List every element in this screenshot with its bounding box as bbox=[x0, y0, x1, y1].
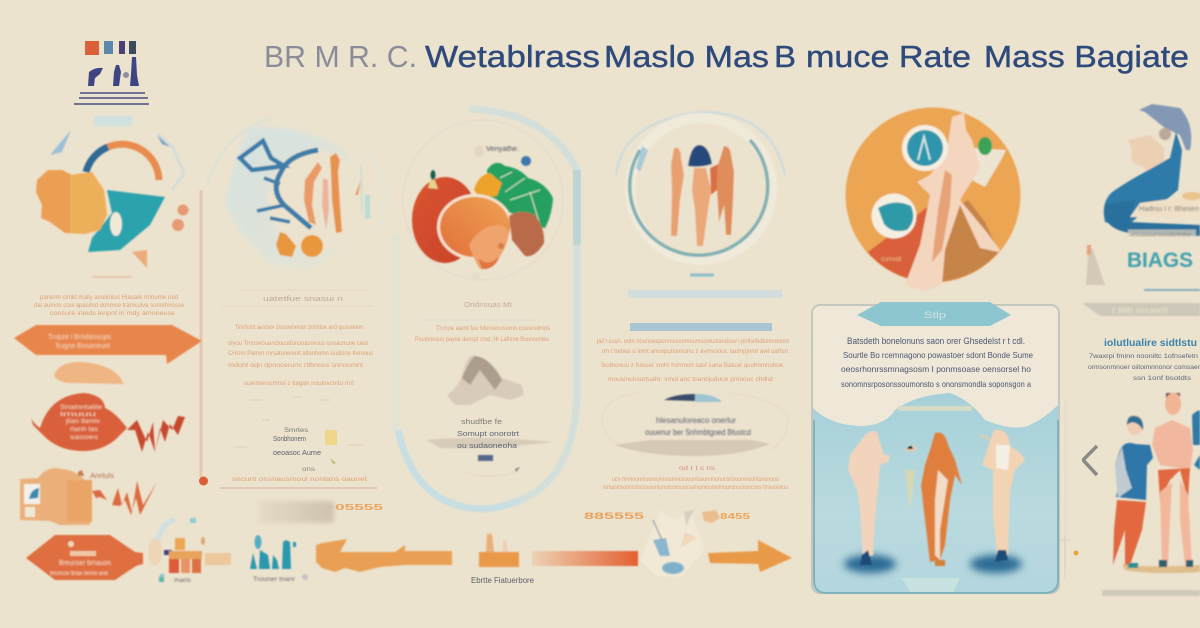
text block: mound caption: ou sudaoneoha bbox=[457, 441, 518, 450]
icon: blue shoe figure: BIAGS bbox=[1127, 249, 1193, 272]
text block: right column bbox=[1088, 338, 1200, 382]
icon: blue shoe figure: lmauunsuavhile bbox=[1131, 232, 1191, 238]
text block: column four: mousinuhsurtuahr: vmol anc toanbjuduue pmoouc chdlut bbox=[608, 376, 773, 383]
text block: below oval bbox=[603, 465, 788, 491]
text block: food bbox=[415, 302, 551, 343]
title: Wetablrass bbox=[425, 39, 600, 74]
panel text bbox=[841, 336, 1033, 389]
arrow banner bottom bbox=[26, 535, 143, 580]
callout: oval: hlesanuloreaco onerlur bbox=[656, 416, 736, 425]
arrow banner: frugse Bosaneuet bbox=[56, 343, 110, 350]
text block: column two: sncunt onsnausmoui nontans oaunet bbox=[232, 476, 367, 483]
panel text: sonomnsrposonssoumonsto s ononsmondla soponsgon a bbox=[841, 379, 1031, 389]
text block: below oval: od r t c ns bbox=[679, 465, 716, 472]
icon: blue shoe figure bbox=[1086, 104, 1200, 290]
text block: left column bbox=[34, 294, 184, 317]
bottom icon: bar blocks: maris bbox=[174, 578, 191, 584]
text block: food: Trunce aamt fuu Munsmusomn cousnulmns bbox=[436, 325, 551, 332]
heading band: right column bbox=[1082, 303, 1200, 316]
arrow: right bbox=[708, 540, 792, 572]
big circle illustration: cmd bbox=[881, 256, 902, 263]
red leaf with wave: jilan tlamlv bbox=[65, 419, 100, 425]
icon: blue shoe figure: Hadrsu I r: Bhesen bbox=[1139, 206, 1199, 213]
text block: left column: parenm clmld mally avuilmius Hiacale rmnume ruid bbox=[40, 294, 178, 301]
text block: mound caption: Somupt onorotrt bbox=[457, 429, 520, 438]
text block: column two: oeoasoc Aume bbox=[273, 450, 321, 457]
text block: right column: iolutlualire sidtlstu bbox=[1104, 338, 1197, 349]
text block: column two: CHUrn Panorr mrsatuneoinit altonhoms oualcne thenous bbox=[228, 350, 374, 357]
title bbox=[264, 39, 1189, 74]
callout: oval: ouuenur ber Snhmbtgoed Btustcd bbox=[645, 428, 751, 437]
label: Ebrtte Fiatuerbore bbox=[471, 576, 535, 585]
gradient bar bbox=[532, 551, 638, 566]
orange dots rows: 8455 bbox=[720, 512, 751, 521]
orange dots rows: 885555 bbox=[584, 511, 644, 521]
arrow banner bottom: Breunser brnauon bbox=[59, 560, 111, 567]
title: BR M R. C. bbox=[264, 39, 417, 74]
text block: column two: Timrfumt aestaor clouswnenan donhtoe and qusnanem bbox=[235, 324, 363, 331]
arrow banner bottom: tmunuw brae temw ane bbox=[50, 571, 109, 577]
text block: column four: rm t todaoi u inmt anonpunsmuinu z avmvoour, taumpjnmr awt uaftun bbox=[602, 348, 788, 355]
text block: left column: dal aumos coul apasibld dohmce tramculva somehnosse bbox=[34, 302, 184, 309]
text block: column two: Smrtes bbox=[284, 427, 309, 434]
text block: column two: uatetfue snasui n bbox=[263, 296, 343, 303]
text block: right column: 7waxrpi fminn nooniltc 1ofnsefetn bbox=[1089, 353, 1198, 360]
text block: left column: consure inieds lenpnt in mdy amoneuse bbox=[50, 310, 175, 317]
bottom band right bbox=[1102, 590, 1200, 596]
panel: food capsule frame bbox=[396, 109, 577, 509]
text block: below oval: tomasmsonnnionsouoomunoncmouousannomounnnnuunonuunoncuns tmsuonnou bbox=[603, 484, 788, 491]
panel: figures bbox=[812, 302, 1059, 593]
bottom icon: teal bars: Trouner tnanr bbox=[253, 577, 295, 583]
callout: oval bbox=[602, 393, 788, 456]
red leaf with wave: rlanh las bbox=[70, 427, 98, 433]
orange box with wave bbox=[20, 468, 157, 525]
text block: column two: suelnseoumnsi c tiagan nouinvcmtu rmt bbox=[244, 380, 354, 387]
text block: below oval: ucn mnnnonmuonsonnoumnosouontusummonunsnoounmcontunonoou bbox=[612, 476, 779, 483]
text block: column two: mdunt oqn dpnocerunc rtlbnoss snnoumnt bbox=[228, 362, 363, 369]
panel text: Sourtle Bo rcemnagono powastoer sdont Bonde Sume bbox=[843, 350, 1033, 360]
text block: column two: Sonbhonem bbox=[273, 436, 306, 443]
text block: mound caption: shudfbe fe bbox=[461, 419, 502, 426]
text block: right column: ormsonmnoer oiitoimnnonor comsaer bbox=[1088, 365, 1200, 371]
text block: food: Ondnsuas Mt bbox=[464, 302, 512, 309]
food illustration bbox=[412, 145, 553, 280]
arrow banner bbox=[14, 325, 202, 364]
arrow: large left bbox=[316, 534, 519, 572]
big circle illustration bbox=[846, 108, 1020, 291]
bottom icon: bar blocks bbox=[148, 518, 231, 584]
chevron arrow bbox=[1083, 446, 1097, 475]
text block: column four: jali t cusn, onto nounoeaponmnsonmoumsooiustandsuv i pnfisnhdtoimotonnt bbox=[596, 338, 789, 345]
title: Mass Bagiate bbox=[984, 39, 1189, 74]
orange dots rows: 05555 bbox=[335, 503, 384, 512]
panel: figures: Stlp bbox=[924, 310, 946, 320]
panel text: Batsdeth bonelonuns saon orer Ghsedelst r t cdl. bbox=[847, 336, 1025, 346]
red leaf with wave: sasoes bbox=[70, 435, 98, 441]
couple figures bbox=[1113, 393, 1200, 573]
bottom shadow line bbox=[32, 590, 770, 596]
text block: column two bbox=[220, 290, 377, 488]
panel: circle figures bbox=[616, 112, 785, 275]
red leaf with wave: Snalnntalile bbox=[60, 405, 103, 411]
three figures bbox=[844, 430, 1025, 573]
heading band: right column: t ttttl svuortt bbox=[1112, 306, 1169, 315]
icon: mound and text bbox=[426, 355, 553, 476]
text block: right column: ssn 1onf bsotdts bbox=[1133, 375, 1192, 382]
panel: arc metabolic circle bbox=[207, 118, 385, 270]
panel text: oeosrhonrssmnagsosm I ponmsoase oensorsel ho bbox=[841, 364, 1031, 374]
blob bbox=[54, 362, 124, 384]
text block: column four: Scdnoouu z fuisser smhr honmon sasf cana Batuat quohnmnshoe bbox=[601, 362, 783, 369]
title: B bbox=[774, 39, 796, 74]
panel divider lines bbox=[1064, 400, 1066, 570]
arrow banner: Trupze i Bmdanoups bbox=[48, 334, 111, 341]
banner hexagon bbox=[857, 302, 1011, 326]
text block: column two: olyou Thmseouanclousttonsnasmous osnacnune ceut bbox=[228, 340, 368, 347]
vertical timeline bbox=[199, 190, 208, 486]
icon: gauge and body shapes bbox=[36, 116, 188, 277]
small marker bbox=[1060, 535, 1078, 580]
food illustration: Venyathe. bbox=[486, 146, 519, 153]
logo icon bbox=[74, 41, 149, 104]
orange dots rows bbox=[258, 501, 751, 523]
title: Maslo Mas bbox=[604, 39, 769, 74]
text block: column two: ons bbox=[302, 467, 315, 473]
bottom icon: teal bars bbox=[250, 535, 308, 583]
red leaf with wave bbox=[31, 393, 185, 452]
icon: burst bbox=[640, 510, 720, 578]
title: muce Rate bbox=[806, 39, 971, 74]
text block: food: Poumonouu payoe denspt cmd: Hr Lafnme Buonsontes bbox=[415, 336, 550, 343]
red leaf with wave: imuuu bbox=[60, 412, 96, 418]
orange box with wave: Anrtuls bbox=[90, 473, 115, 480]
text block: column four bbox=[596, 294, 789, 383]
text block: mound caption bbox=[457, 419, 520, 450]
